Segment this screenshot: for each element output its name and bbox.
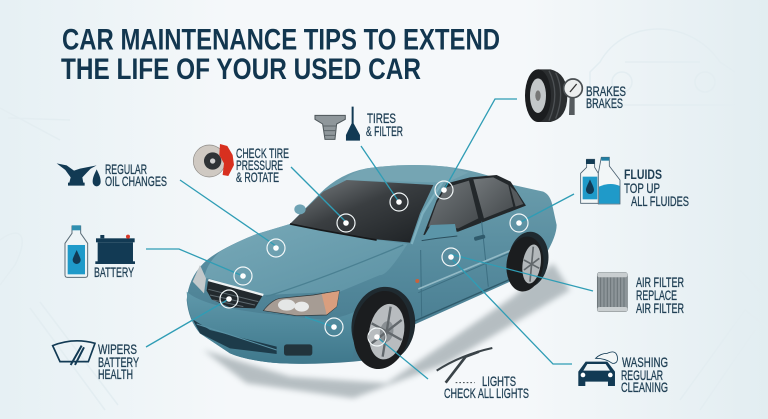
label: fluids: ALL FLUIDES (631, 193, 689, 209)
front bumper (187, 292, 367, 364)
hood (204, 224, 407, 295)
ground shadow (203, 263, 570, 398)
label: regular oil changes (105, 161, 167, 189)
icon: windshield wiper (53, 341, 95, 365)
a-pillar (412, 181, 443, 244)
label: regular oil changes: OIL CHANGES (105, 173, 167, 189)
grille (207, 281, 263, 308)
label: lights (444, 373, 529, 401)
rear wheel (505, 229, 552, 291)
label: regular oil changes: REGULAR (105, 161, 147, 177)
bumper intake (193, 319, 277, 354)
car body (187, 165, 557, 364)
roof (343, 165, 468, 183)
label: lights: CHECK ALL LIGHTS (444, 385, 529, 401)
label: wipers battery health: WIPERS (98, 341, 137, 357)
label: lights: LIGHTS (482, 373, 516, 389)
label: air filter: AIR FILTER (636, 274, 684, 290)
icon: tire and gauge (525, 69, 582, 122)
icon: fluid bottle and battery (65, 225, 135, 277)
title (61, 24, 500, 86)
label: tires and filter: & FILTER (366, 123, 403, 139)
icon: filter and dropper (315, 107, 360, 141)
door lines (421, 222, 488, 317)
label: brakes (586, 83, 626, 111)
icon: wiper blade (437, 348, 492, 383)
title: THE LIFE OF YOUR USED CAR (61, 53, 421, 86)
label: wipers battery health (98, 341, 139, 382)
icon: fluid bottles (581, 157, 620, 204)
label: brakes: BRAKES (586, 83, 626, 99)
label: air filter: REPLACE (636, 287, 677, 303)
hotspots (220, 181, 528, 346)
label: tires and filter: TIRES (367, 110, 396, 126)
label: washing: CLEANING (621, 379, 668, 395)
label: battery: BATTERY (94, 264, 134, 280)
callout lines (146, 99, 593, 379)
icon: brake disc (193, 144, 234, 177)
label: fluids: FLUIDS (624, 166, 662, 182)
label: air filter: AIR FILTER (636, 300, 684, 316)
side windows (428, 181, 478, 228)
title: CAR MAINTENANCE TIPS TO EXTEND (62, 24, 500, 56)
label: check tire pressure: CHECK TIRE (236, 145, 289, 161)
label: wipers battery health: BATTERY (98, 354, 139, 370)
label: washing: WASHING (622, 354, 668, 370)
label: wipers battery health: HEALTH (98, 366, 133, 382)
label: brakes: BRAKES (586, 95, 623, 111)
icon: car washing (578, 352, 617, 386)
label: check tire pressure: PRESSURE (236, 157, 283, 173)
front wheel arch and wheel (345, 282, 421, 368)
label: air filter (636, 274, 684, 316)
headlights (263, 291, 339, 316)
label: fluids (624, 166, 689, 209)
side mirror (422, 224, 457, 241)
icon: air filter (597, 273, 627, 312)
car illustration (187, 165, 570, 398)
windshield (290, 180, 433, 243)
label: washing: REGULAR (621, 367, 663, 383)
label: check tire pressure: & ROTATE (236, 169, 279, 185)
label: fluids: TOP UP (624, 180, 660, 196)
icon: oil can (57, 163, 101, 186)
label: check tire pressure (236, 145, 289, 185)
window trim (423, 175, 526, 235)
label: tires and filter (366, 110, 403, 139)
label: washing (621, 354, 668, 395)
